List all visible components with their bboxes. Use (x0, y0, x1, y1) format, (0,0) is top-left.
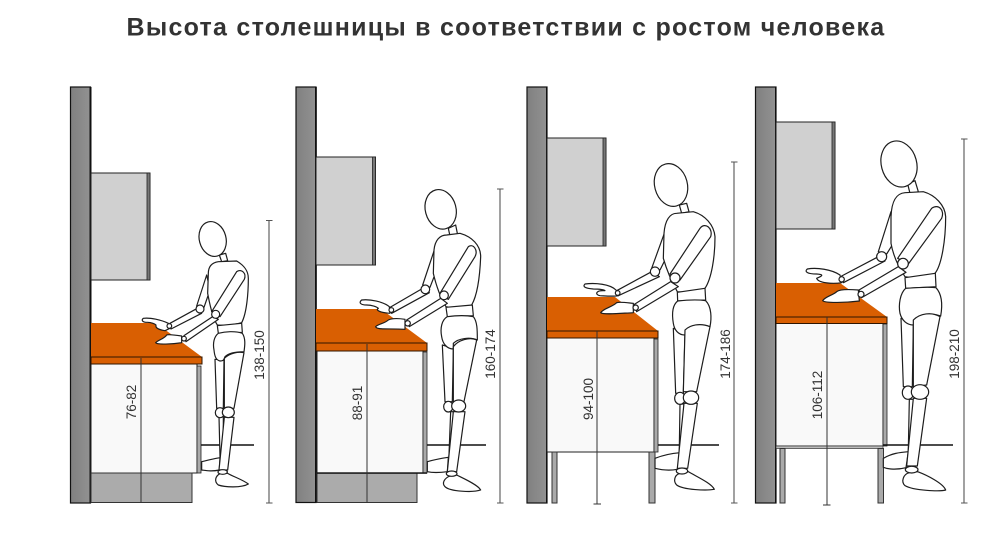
base cabinet (776, 323, 887, 448)
panel: height 174-186 (527, 87, 738, 504)
wall (756, 87, 776, 503)
figure (360, 186, 481, 491)
title: Высота столешницы в соответствии с ростом человека (127, 14, 885, 42)
figure (806, 137, 946, 491)
person height dimension (483, 189, 504, 503)
counter height dimension: 76-82 (124, 385, 139, 419)
counter height dimension: 94-100 (581, 378, 596, 420)
floor line (427, 444, 486, 446)
person height dimension: 198-210 (947, 329, 962, 379)
wall cabinet (316, 157, 376, 265)
counter height dimension (810, 317, 830, 505)
floor line (658, 444, 719, 446)
panel: height 138-150 (70, 87, 272, 503)
countertop (547, 297, 658, 338)
person height dimension: 160-174 (483, 329, 498, 379)
figure (584, 160, 715, 490)
person height dimension (252, 220, 272, 503)
countertop (91, 323, 202, 364)
cabinet legs (780, 448, 884, 503)
floor line (201, 444, 254, 446)
base cabinet (547, 338, 658, 452)
person height dimension: 138-150 (252, 330, 267, 380)
panel: height 198-210 (756, 87, 968, 505)
person height dimension: 174-186 (718, 329, 733, 379)
figure (142, 218, 248, 487)
wall cabinet (547, 138, 606, 246)
wall cabinet (91, 173, 150, 280)
person height dimension (718, 162, 738, 503)
countertop (316, 309, 427, 351)
cabinet legs (552, 452, 655, 503)
floor line (883, 444, 953, 446)
wall (527, 87, 548, 503)
panel: height 160-174 (296, 87, 504, 503)
plinth (317, 472, 427, 502)
counter height dimension: 106-112 (810, 371, 825, 419)
counter height dimension (581, 331, 601, 504)
person height dimension (947, 139, 968, 503)
wall (70, 87, 92, 503)
counter height dimension: 88-91 (350, 386, 365, 420)
plinth (91, 473, 192, 502)
base cabinet (91, 364, 201, 473)
countertop (776, 283, 887, 324)
base cabinet (317, 351, 427, 473)
wall cabinet (776, 122, 835, 229)
wall (296, 87, 317, 502)
